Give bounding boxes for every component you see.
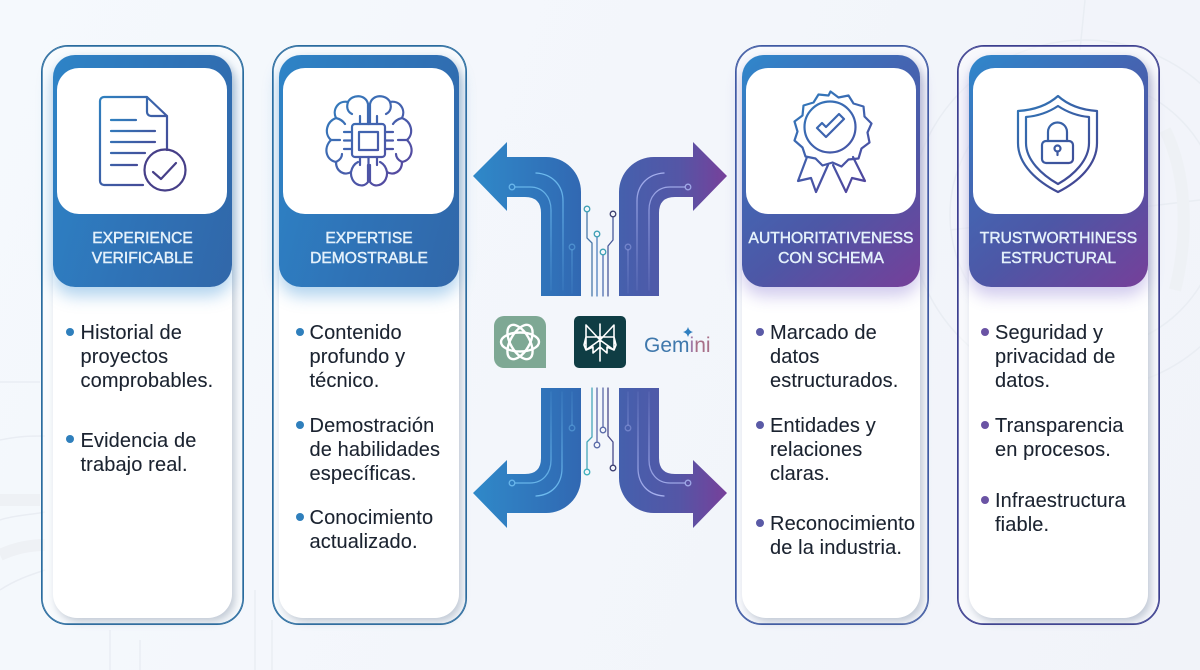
bullet text: demostracion [310, 415, 440, 485]
bullet text: transparencia: Transparencia [995, 415, 1124, 437]
bullet text: seguridad: privacidad de [995, 346, 1116, 368]
bullet dot [981, 328, 989, 336]
bullet text: seguridad: Seguridad y [995, 322, 1103, 344]
bullet text: reconocimiento: de la industria. [770, 537, 902, 559]
panel body [279, 55, 459, 618]
panel body [969, 55, 1148, 618]
header: trustworthiness estructural [969, 55, 1148, 287]
panel: experience verificable [41, 45, 244, 625]
circuit lines: top [584, 206, 616, 296]
heading: CON SCHEMA [778, 250, 884, 267]
bullet text: demostracion: específicas. [310, 463, 417, 485]
icon tile [973, 68, 1144, 214]
bullet dot [66, 328, 74, 336]
bullet text: historial: Historial de [80, 322, 182, 344]
logo: Perplexity [574, 316, 626, 368]
icon: award ribbon [794, 92, 872, 192]
bullet text: infraestructura: Infraestructura [995, 490, 1126, 512]
bullet dot [756, 421, 764, 429]
panel body [742, 55, 920, 618]
bullet text: transparencia [995, 415, 1124, 461]
heading [92, 230, 193, 267]
bullet text: contenido: Contenido [310, 322, 402, 344]
bullet text: marcado [770, 322, 898, 392]
bullet dot [981, 421, 989, 429]
icon: shield with lock [1018, 96, 1097, 192]
arrow: bottom left [473, 388, 581, 528]
bullet text: infraestructura: fiable. [995, 514, 1049, 536]
bullet text: historial [80, 322, 213, 392]
logo: Gemini: Gemini [644, 334, 711, 357]
bullet text: reconocimiento: Reconocimiento [770, 513, 915, 535]
bullet text: seguridad [995, 322, 1116, 392]
bullet text: entidades: Entidades y [770, 415, 876, 437]
bullet text: transparencia: en procesos. [995, 439, 1111, 461]
heading: ESTRUCTURAL [1001, 250, 1116, 267]
arrow: bottom right [619, 388, 727, 528]
bullet dot [296, 513, 304, 521]
header: expertise demostrable [279, 55, 459, 287]
panel body [53, 55, 232, 618]
panel: authoritativeness con schema [735, 45, 929, 625]
bullet text: marcado: datos [770, 346, 820, 368]
icon: brain with chip [326, 96, 412, 185]
bullet text: reconocimiento [770, 513, 915, 559]
heading [748, 230, 913, 267]
bullet text: historial: comprobables. [80, 370, 213, 392]
bullet text: contenido [310, 322, 406, 392]
bullet dot [296, 328, 304, 336]
icon tile [57, 68, 227, 214]
bullet text: evidencia: trabajo real. [80, 454, 188, 476]
bullet text: historial: proyectos [80, 346, 168, 368]
bullet text: entidades [770, 415, 876, 485]
bullet text: contenido: profundo y [310, 346, 405, 368]
heading: VERIFICABLE [92, 250, 193, 267]
circuit lines: bottom [584, 388, 616, 475]
icon: document with check [100, 97, 186, 190]
bullet dot [756, 328, 764, 336]
heading [980, 230, 1137, 267]
heading: EXPERIENCE [92, 230, 193, 247]
bullet text: evidencia: Evidencia de [80, 430, 196, 452]
bullet text: contenido: técnico. [310, 370, 379, 392]
heading: DEMOSTRABLE [310, 250, 428, 267]
icon tile [746, 68, 916, 214]
bullet dot [66, 435, 74, 443]
heading: EXPERTISE [325, 230, 413, 247]
bullet text: entidades: claras. [770, 463, 830, 485]
bullet text: conocimiento [310, 507, 433, 553]
bullet text: entidades: relaciones [770, 439, 862, 461]
panel: expertise demostrable [272, 45, 467, 625]
bullet text: seguridad: datos. [995, 370, 1050, 392]
bullet text: marcado: Marcado de [770, 322, 877, 344]
bullet text: conocimiento: Conocimiento [310, 507, 433, 529]
bullet text: demostracion: de habilidades [310, 439, 440, 461]
bullet text: infraestructura [995, 490, 1126, 536]
bullet dot [296, 421, 304, 429]
panel: trustworthiness estructural [957, 45, 1160, 625]
bullet dot [756, 519, 764, 527]
logo: ChatGPT [494, 316, 546, 368]
bullet text: marcado: estructurados. [770, 370, 898, 392]
heading [310, 230, 428, 267]
heading: AUTHORITATIVENESS [749, 230, 913, 247]
header: experience verificable [53, 55, 232, 287]
arrow: top right [619, 142, 727, 296]
header: authoritativeness con schema [742, 55, 920, 287]
heading: TRUSTWORTHINESS [980, 230, 1137, 247]
bullet text: evidencia [80, 430, 196, 476]
arrow: top left [473, 142, 581, 296]
icon tile [283, 68, 454, 214]
bullet text: conocimiento: actualizado. [310, 531, 418, 553]
bullet text: demostracion: Demostración [310, 415, 434, 437]
bullet dot [981, 496, 989, 504]
